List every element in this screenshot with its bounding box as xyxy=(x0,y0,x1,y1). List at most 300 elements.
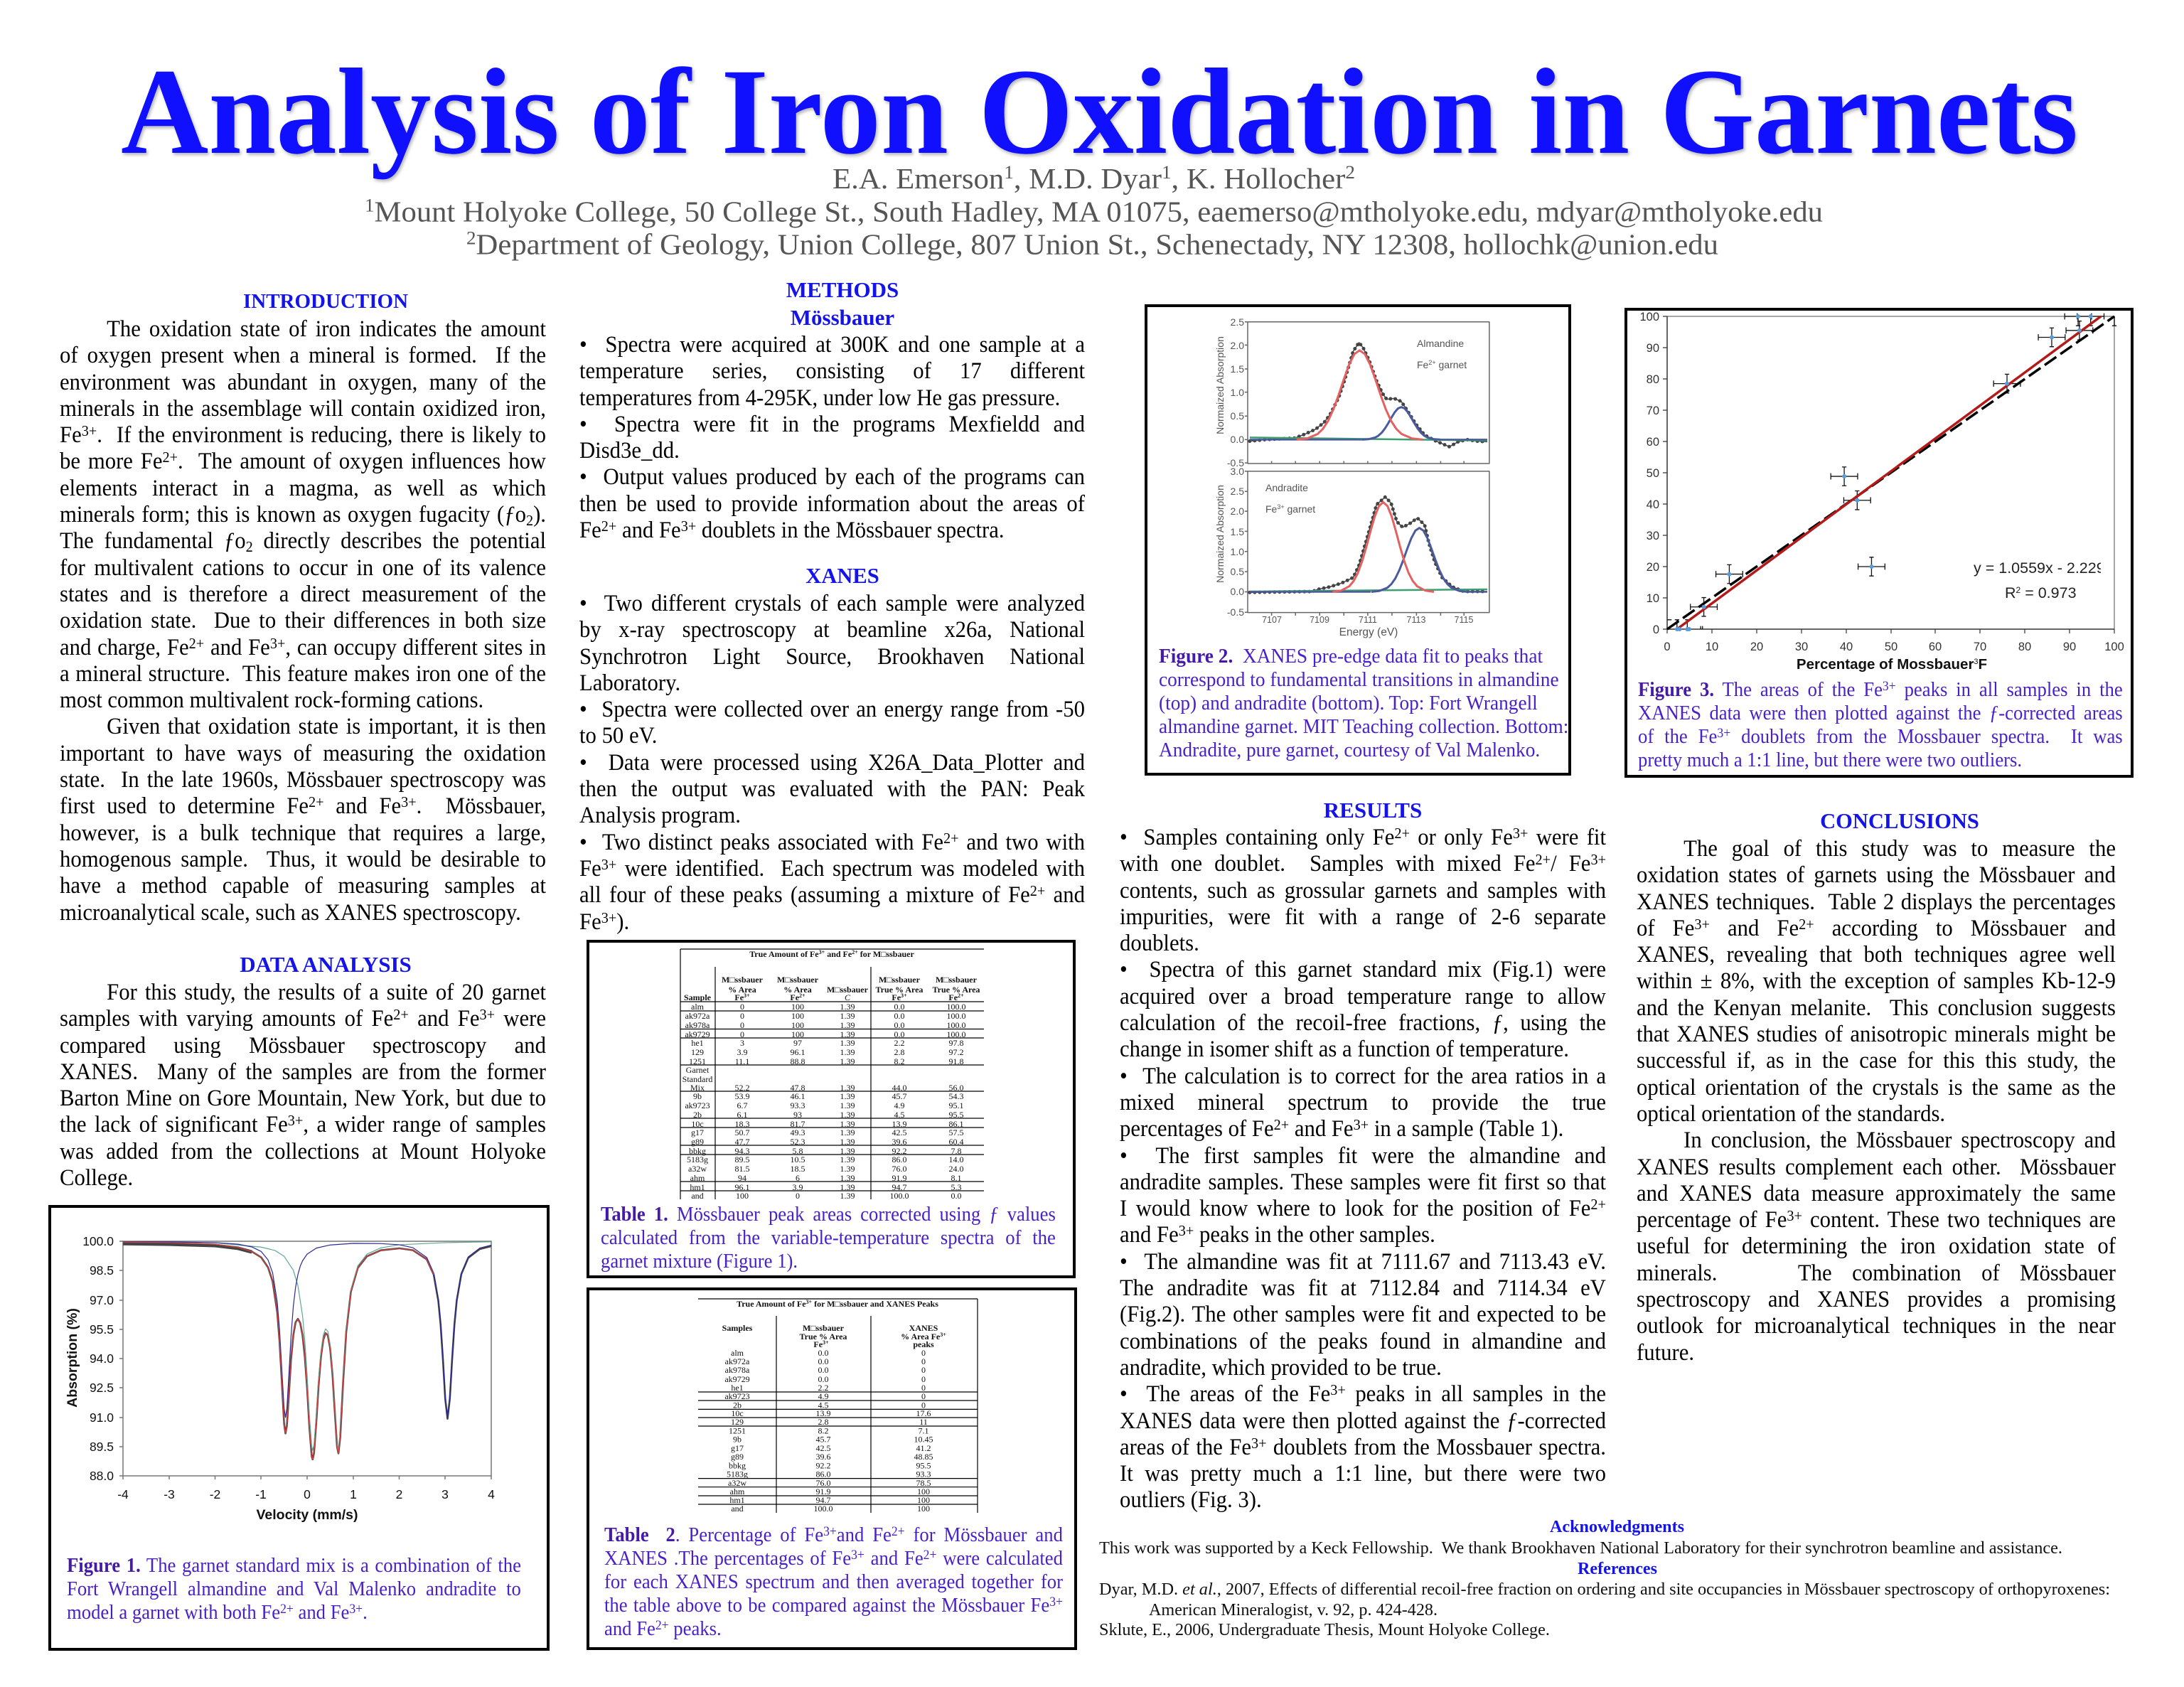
chart: Mössbauer spectrum: -1 xyxy=(255,1487,267,1501)
heading: results: RESULTS xyxy=(1324,798,1422,823)
table: true amount for Mössbauer: and Fe xyxy=(825,949,852,959)
table: true amount for Mössbauer: 47.7 xyxy=(735,1137,749,1147)
table: true amount for Mössbauer: 94.7 xyxy=(892,1182,907,1192)
table: true amount for Mössbauer and XANES: 39.6 xyxy=(816,1452,830,1462)
table: true amount for Mössbauer: ak9729 xyxy=(685,1029,710,1039)
acknowledgments and references: Acknowledgments xyxy=(1550,1518,1684,1536)
table: true amount for Mössbauer: 57.5 xyxy=(948,1128,964,1137)
table: true amount for Mössbauer: ak978a xyxy=(685,1020,710,1030)
table: true amount for Mössbauer: M□ssbauer xyxy=(827,985,869,995)
table: true amount for Mössbauer: 1.39 xyxy=(840,1182,855,1192)
table: true amount for Mössbauer: 3.9 xyxy=(737,1047,748,1057)
text block: introduction: minerals form; this is known as oxygen fugacity (ƒo2). xyxy=(60,502,546,529)
table: true amount for Mössbauer: 1.39 xyxy=(840,1128,855,1137)
chart: XANES vs Mössbauer scatter plot: 10 xyxy=(1647,592,1659,605)
table: true amount for Mössbauer: 52.2 xyxy=(735,1083,749,1093)
table: true amount for Mössbauer and XANES: a32w xyxy=(728,1478,746,1488)
text block: methods XANES: all four of these peaks (assuming a mixture of Fe2+ and xyxy=(579,882,1085,908)
table: true amount for Mössbauer and XANES: he1 xyxy=(731,1383,744,1393)
text block: results: mixed mineral spectrum to provide the true xyxy=(1120,1090,1606,1115)
text block: results: and Fe3+ peaks in the other samples. xyxy=(1120,1222,1435,1248)
table: true amount for Mössbauer: 42.5 xyxy=(892,1128,907,1137)
chart: XANES pre-edge spectra: garnet xyxy=(1285,503,1315,515)
text block: conclusions: spectroscopy and XANES provides a promising xyxy=(1637,1287,2116,1312)
table: true amount for Mössbauer: 1251 xyxy=(689,1056,706,1066)
text block: results: calculation of the recoil-free fractions, ƒ, using the xyxy=(1120,1010,1606,1036)
table: true amount for Mössbauer: Sample xyxy=(684,992,712,1002)
table: true amount for Mössbauer: 96.1 xyxy=(791,1047,805,1057)
text block: conclusions: within ± 8%, with the exception of samples Kb-12-9 xyxy=(1637,968,2116,994)
chart: XANES vs Mössbauer scatter plot: 50 xyxy=(1885,641,1897,653)
chart: XANES pre-edge spectra: Normaized Absorption xyxy=(1214,485,1226,583)
table: true amount for Mössbauer: 100 xyxy=(791,1011,804,1021)
text block: methods XANES: Fe3+ were identified. Each spectrum was modeled with xyxy=(579,856,1085,882)
authors and affiliations: Mount Holyoke College, 50 College St., South Hadley, MA 01075, eaemerso@mtholyoke.edu, mdyar@mtholyoke.edu xyxy=(375,196,1823,228)
table: true amount for Mössbauer: 11.1 xyxy=(735,1056,749,1066)
text block: conclusions: and XANES data measure approximately the same xyxy=(1637,1181,2116,1206)
table: true amount for Mössbauer: 89.5 xyxy=(735,1155,749,1164)
table: true amount for Mössbauer: 97 xyxy=(793,1038,802,1048)
table: true amount for Mössbauer and XANES: 0.0 xyxy=(818,1356,829,1366)
table: true amount for Mössbauer: 0 xyxy=(740,1029,744,1039)
table: true amount for Mössbauer: 100.0 xyxy=(890,1191,909,1201)
text block: results: percentages of Fe2+ and Fe3+ in a sample (Table 1). xyxy=(1120,1116,1563,1142)
table: true amount for Mössbauer: Standard xyxy=(682,1074,712,1084)
table: true amount for Mössbauer and XANES: Samples xyxy=(722,1323,753,1333)
chart: XANES vs Mössbauer scatter plot: 30 xyxy=(1647,530,1659,542)
table: true amount for Mössbauer: 0.0 xyxy=(894,1011,904,1021)
chart: XANES pre-edge spectra: 7111 xyxy=(1359,615,1377,625)
subheading: Mössbauer: Mössbauer xyxy=(791,305,894,330)
table: true amount for Mössbauer and XANES: alm xyxy=(731,1348,744,1358)
table: true amount for Mössbauer: 2b xyxy=(693,1110,702,1120)
table: true amount for Mössbauer: hm1 xyxy=(690,1182,705,1192)
table: true amount for Mössbauer: 18.5 xyxy=(791,1164,805,1174)
table: true amount for Mössbauer and XANES: 86.0 xyxy=(816,1469,830,1479)
text block: introduction: homogenous sample. Thus, it would be desirable to xyxy=(60,847,546,872)
table: true amount for Mössbauer: 0.0 xyxy=(951,1191,961,1201)
table: true amount for Mössbauer and XANES: 8.2 xyxy=(818,1426,829,1436)
heading: methods: METHODS xyxy=(786,277,899,302)
text block: methods Mössbauer xyxy=(579,332,1085,543)
table: true amount for Mössbauer and XANES: 7.1 xyxy=(919,1426,928,1436)
caption: figure 2: (top) and andradite (bottom). Top: Fort Wrangell xyxy=(1159,692,1538,714)
text block: results: andradite samples. These samples were fit first so that xyxy=(1120,1169,1606,1195)
text block: methods XANES: Analysis program. xyxy=(579,803,741,828)
text block: results: areas of the Fe3+ doublets from the Mossbauer spectra. xyxy=(1120,1435,1606,1460)
text block: data analysis: compared using Mössbauer spectroscopy and xyxy=(60,1033,546,1059)
text block: methods Mössbauer: then be used to provide information about the areas of xyxy=(579,491,1085,517)
caption: figure 3: pretty much a 1:1 line, but there were two outliers. xyxy=(1638,749,2022,771)
authors and affiliations: E.A. Emerson xyxy=(833,162,997,195)
text block: introduction: states and is therefore a direct measurement of the xyxy=(60,582,546,607)
chart: XANES vs Mössbauer scatter plot: y = 1.0559x - 2.229 xyxy=(1974,559,2105,577)
table: true amount for Mössbauer: 10.5 xyxy=(791,1155,805,1164)
chart: Mössbauer spectrum: 0 xyxy=(304,1487,311,1501)
table: true amount for Mössbauer and XANES: 93.3 xyxy=(916,1469,931,1479)
chart: XANES pre-edge spectra: 2.0 xyxy=(1231,505,1244,517)
text block: data analysis: was added from the collections at Mount Holyoke xyxy=(60,1139,546,1164)
chart: Mössbauer spectrum: 88.0 xyxy=(90,1469,114,1483)
chart: XANES vs Mössbauer scatter plot: R xyxy=(2005,584,2016,601)
table: true amount for Mössbauer: 14.0 xyxy=(948,1155,964,1164)
text block: conclusions: percentage of Fe3+ content. These two techniques are xyxy=(1637,1207,2116,1233)
chart: XANES pre-edge spectra: 1.5 xyxy=(1231,363,1244,375)
text block: conclusions: optical orientation of the standards. xyxy=(1637,1101,1945,1127)
table: true amount for Mössbauer: 86.0 xyxy=(892,1155,907,1164)
chart: XANES vs Mössbauer scatter plot: Percentage of Mossbauer xyxy=(1797,656,1974,673)
table: true amount for Mössbauer: 0.0 xyxy=(894,1029,904,1039)
chart: XANES pre-edge spectra: 7107 xyxy=(1262,615,1282,625)
caption: table 2: and Fe2+ peaks. xyxy=(604,1617,722,1640)
chart: XANES vs Mössbauer scatter plot: 70 xyxy=(1647,405,1659,417)
chart: XANES vs Mössbauer scatter plot: 2 xyxy=(2016,585,2021,595)
table: true amount for Mössbauer and XANES: 100 xyxy=(917,1504,930,1514)
text block: introduction: a mineral structure. This feature makes iron one of the xyxy=(60,661,546,687)
table: true amount for Mössbauer: 6.7 xyxy=(737,1100,748,1110)
table: true amount for Mössbauer: 1.39 xyxy=(840,1173,855,1183)
table: true amount for Mössbauer: 1.39 xyxy=(840,1100,855,1110)
table: true amount for Mössbauer and XANES: 0 xyxy=(921,1365,926,1375)
table: true amount for Mössbauer: 100 xyxy=(791,1002,804,1012)
table: true amount for Mössbauer and XANES: True Amount of Fe xyxy=(737,1299,806,1309)
authors and affiliations xyxy=(365,162,1823,260)
table: true amount for Mössbauer: True % Area xyxy=(876,985,923,995)
table: true amount for Mössbauer and XANES: 3+ xyxy=(806,1299,813,1305)
table: true amount for Mössbauer: 7.8 xyxy=(951,1146,961,1156)
table: true amount for Mössbauer: 91.8 xyxy=(948,1056,964,1066)
text block: introduction: The oxidation state of iron indicates the amount xyxy=(107,316,546,342)
table: true amount for Mössbauer: 100.0 xyxy=(947,1029,965,1039)
table: true amount for Mössbauer and XANES: bbkg xyxy=(729,1460,746,1470)
text block: conclusions: of Fe3+ and Fe2+ according to Mössbauer and xyxy=(1637,916,2116,941)
text block: results: • Samples containing only Fe2+ or only Fe3+ were fit xyxy=(1120,825,1606,850)
table: true amount for Mössbauer and XANES: 0.0 xyxy=(818,1374,829,1384)
chart: XANES pre-edge spectra: 3+ xyxy=(1277,503,1285,510)
caption: table 1: garnet mixture (Figure 1). xyxy=(601,1250,798,1273)
text block: data analysis xyxy=(60,980,546,1191)
authors and affiliations: 1 xyxy=(1004,162,1014,183)
heading: XANES: XANES xyxy=(805,564,879,588)
table: true amount for Mössbauer: 0 xyxy=(740,1020,744,1030)
table: true amount for Mössbauer: 53.9 xyxy=(735,1091,749,1101)
table: true amount for Mössbauer xyxy=(680,948,984,1201)
text block: methods XANES: Synchrotron Light Source, Brookhaven National xyxy=(579,644,1085,670)
table: true amount for Mössbauer: % Area xyxy=(728,985,756,995)
table: true amount for Mössbauer: 0.0 xyxy=(894,1002,904,1012)
table: true amount for Mössbauer and XANES: XANES xyxy=(909,1323,938,1333)
text block: data analysis: samples with varying amounts of Fe2+ and Fe3+ were xyxy=(60,1006,546,1032)
table: true amount for Mössbauer: ahm xyxy=(690,1173,705,1183)
table: true amount for Mössbauer: 5183g xyxy=(687,1155,708,1164)
chart: XANES pre-edge spectra: Almandine xyxy=(1417,338,1464,349)
table: true amount for Mössbauer and XANES: 5183g xyxy=(727,1469,748,1479)
chart: XANES vs Mössbauer scatter plot: 20 xyxy=(1647,561,1659,574)
table: true amount for Mössbauer: 0 xyxy=(740,1011,744,1021)
table: true amount for Mössbauer: 0 xyxy=(740,1002,744,1012)
table: true amount for Mössbauer: Fe xyxy=(892,992,901,1002)
table: true amount for Mössbauer and XANES: 0 xyxy=(921,1401,926,1410)
table: true amount for Mössbauer: Garnet xyxy=(686,1065,710,1075)
table: true amount for Mössbauer and XANES: 42.5 xyxy=(816,1443,830,1453)
caption: table 2: XANES .The percentages of Fe3+ and Fe2+ were calculated xyxy=(604,1547,1063,1570)
table: true amount for Mössbauer: 13.9 xyxy=(892,1119,907,1129)
text block: methods XANES: • Spectra were collected over an energy range from -50 xyxy=(579,697,1085,722)
text block: methods Mössbauer: Disd3e_dd. xyxy=(579,438,680,464)
text block: conclusions: oxidation states of garnets using the Mössbauer and xyxy=(1637,862,2116,888)
table: true amount for Mössbauer: 8.1 xyxy=(951,1173,961,1183)
table: true amount for Mössbauer and XANES: 100 xyxy=(917,1487,930,1496)
text block: conclusions: XANES techniques. Table 2 displays the percentages xyxy=(1637,889,2116,915)
table: true amount for Mössbauer: Mix xyxy=(690,1083,705,1093)
text block: introduction: of oxygen present when a mineral is formed. If the xyxy=(60,343,546,368)
table: true amount for Mössbauer: 4.5 xyxy=(894,1110,904,1120)
table: true amount for Mössbauer: M□ssbauer xyxy=(777,975,819,985)
table: true amount for Mössbauer and XANES: 10.45 xyxy=(914,1435,933,1445)
table: true amount for Mössbauer: 1.39 xyxy=(840,1083,855,1093)
heading: data analysis: DATA ANALYSIS xyxy=(240,952,412,977)
acknowledgments and references: Sklute, E., 2006, Undergraduate Thesis, Mount Holyoke College. xyxy=(1099,1621,1550,1639)
caption: figure 1: Figure 1. The garnet standard mix is a combination of the xyxy=(67,1554,521,1577)
caption: figure 3: Figure 3. The areas of the Fe3+ peaks in all samples in the xyxy=(1638,678,2123,701)
table: true amount for Mössbauer and XANES: 4.5 xyxy=(818,1401,829,1410)
caption: figure 3 xyxy=(1638,678,2123,771)
table: true amount for Mössbauer and XANES xyxy=(698,1298,978,1514)
table: true amount for Mössbauer and XANES: ak978a xyxy=(725,1365,750,1375)
table: true amount for Mössbauer: 1.39 xyxy=(840,1002,855,1012)
chart: Mössbauer spectrum: -2 xyxy=(210,1487,220,1501)
table: true amount for Mössbauer: 93 xyxy=(793,1110,802,1120)
table: true amount for Mössbauer: 54.3 xyxy=(948,1091,964,1101)
text block: results: impurities, were fit with a range of 2-6 separate xyxy=(1120,904,1606,930)
table: true amount for Mössbauer: a32w xyxy=(688,1164,707,1174)
chart: XANES vs Mössbauer scatter plot: 0 xyxy=(1653,623,1659,636)
text block: conclusions: minerals. The combination of Mössbauer xyxy=(1637,1260,2116,1286)
caption: figure 3: XANES data were then plotted against the ƒ-corrected areas xyxy=(1638,702,2123,724)
acknowledgments and references: American Mineralogist, v. 92, p. 424-428. xyxy=(1149,1601,1438,1619)
text block: conclusions: outlook for microanalytical techniques in the near xyxy=(1637,1313,2116,1339)
caption: table 2: for each XANES spectrum and then averaged together for xyxy=(604,1570,1063,1593)
table: true amount for Mössbauer: True Amount of Fe xyxy=(749,949,819,959)
chart: Mössbauer spectrum: -4 xyxy=(117,1487,129,1501)
table: true amount for Mössbauer: Fe xyxy=(948,992,958,1002)
text block: data analysis: XANES. Many of the samples are from the former xyxy=(60,1059,546,1085)
table: true amount for Mössbauer and XANES: 129 xyxy=(731,1417,744,1427)
caption: table 2 xyxy=(604,1523,1063,1640)
table: true amount for Mössbauer: 95.1 xyxy=(948,1100,964,1110)
text block: introduction: be more Fe2+. The amount of oxygen influences how xyxy=(60,449,546,474)
caption: figure 1: Fort Wrangell almandine and Val Malenko andradite to xyxy=(67,1578,521,1600)
chart: XANES vs Mössbauer scatter plot: 30 xyxy=(1795,641,1808,653)
chart: XANES pre-edge spectra: 3.0 xyxy=(1231,466,1244,477)
table: true amount for Mössbauer and XANES: 0 xyxy=(921,1383,926,1393)
text block: methods XANES: then the output was evaluated with the PAN: Peak xyxy=(579,776,1085,802)
table: true amount for Mössbauer and XANES: 76.0 xyxy=(816,1478,830,1488)
caption: figure 2: Figure 2. XANES pre-edge data fit to peaks that xyxy=(1159,645,1543,668)
table: true amount for Mössbauer: 93.3 xyxy=(791,1100,805,1110)
text block: conclusions: The goal of this study was to measure the xyxy=(1684,836,2116,862)
table: true amount for Mössbauer: 100.0 xyxy=(947,1002,965,1012)
table: true amount for Mössbauer: g89 xyxy=(691,1137,704,1147)
table: true amount for Mössbauer: Fe xyxy=(790,992,799,1002)
table: true amount for Mössbauer: 86.1 xyxy=(948,1119,964,1129)
chart: Mössbauer spectrum: -3 xyxy=(164,1487,175,1501)
table: true amount for Mössbauer: 3.9 xyxy=(792,1182,803,1192)
table: true amount for Mössbauer and XANES: 0 xyxy=(921,1374,926,1384)
table: true amount for Mössbauer: 1.39 xyxy=(840,1137,855,1147)
chart: XANES pre-edge spectra: 2.0 xyxy=(1231,340,1244,351)
table: true amount for Mössbauer and XANES: 0.0 xyxy=(818,1348,829,1358)
text block: introduction: state. In the late 1960s, Mössbauer spectroscopy was xyxy=(60,767,546,793)
chart: Mössbauer spectrum: 98.5 xyxy=(90,1263,114,1278)
chart: XANES vs Mössbauer scatter plot xyxy=(1639,311,2124,673)
chart: XANES pre-edge spectra: 2.5 xyxy=(1231,486,1244,497)
text block: methods XANES: Laboratory. xyxy=(579,670,680,696)
table: true amount for Mössbauer: 1.39 xyxy=(840,1146,855,1156)
text block: methods Mössbauer: temperatures from 4-295K, under low He gas pressure. xyxy=(579,385,1060,411)
panel: figure 1 xyxy=(48,1205,550,1651)
text block: results: • The first samples fit were the almandine and xyxy=(1120,1143,1606,1169)
table: true amount for Mössbauer: 97.2 xyxy=(948,1047,964,1057)
table: true amount for Mössbauer: 1.39 xyxy=(840,1155,855,1164)
chart: XANES vs Mössbauer scatter plot: 40 xyxy=(1840,641,1853,653)
table: true amount for Mössbauer: he1 xyxy=(691,1038,704,1048)
chart: XANES pre-edge spectra: Normaized Absorption xyxy=(1214,336,1226,434)
chart: Mössbauer spectrum xyxy=(65,1234,495,1523)
table: true amount for Mössbauer and XANES: M□ssbauer xyxy=(803,1323,845,1333)
text block: data analysis: the lack of significant Fe3+, a wider range of samples xyxy=(60,1112,546,1137)
table: true amount for Mössbauer: bbkg xyxy=(689,1146,706,1156)
chart: XANES pre-edge spectra: 1.0 xyxy=(1231,387,1244,398)
caption: figure 2: correspond to fundamental transitions in almandine xyxy=(1159,668,1559,691)
acknowledgments and references xyxy=(1099,1518,2110,1639)
chart: XANES vs Mössbauer scatter plot: 40 xyxy=(1647,498,1659,511)
panel: figure 2 xyxy=(1145,304,1571,776)
acknowledgments and references: This work was supported by a Keck Fellowship. We thank Brookhaven National Laboratory for their synchrotron beamline and assistance. xyxy=(1099,1539,2062,1558)
table: true amount for Mössbauer: Fe xyxy=(734,992,744,1002)
table: true amount for Mössbauer: 81.5 xyxy=(735,1164,749,1174)
table: true amount for Mössbauer: 56.0 xyxy=(948,1083,964,1093)
chart: XANES vs Mössbauer scatter plot: 100 xyxy=(1639,311,1659,323)
table: true amount for Mössbauer and XANES: 95.5 xyxy=(916,1460,931,1470)
caption: figure 3: of the Fe3+ doublets from the Mossbauer spectra. It was xyxy=(1638,725,2123,748)
text block: introduction: for multivalent cations to occur in one of its valence xyxy=(60,555,546,581)
text block: introduction: microanalytical scale, such as XANES spectroscopy. xyxy=(60,900,521,926)
acknowledgments and references: References xyxy=(1578,1560,1657,1578)
text block: results: • Spectra of this garnet standard mix (Fig.1) were xyxy=(1120,957,1606,982)
table: true amount for Mössbauer: 10c xyxy=(691,1119,704,1129)
text block: introduction xyxy=(60,316,546,926)
caption: figure 2 xyxy=(1159,645,1568,761)
table: true amount for Mössbauer: 1.39 xyxy=(840,1020,855,1030)
chart: XANES pre-edge spectra: Energy (eV) xyxy=(1339,626,1398,638)
table: true amount for Mössbauer: % Area xyxy=(783,985,812,995)
text block: introduction: environment was abundant in oxygen, many of the xyxy=(60,370,546,395)
table: true amount for Mössbauer: 1.39 xyxy=(840,1056,855,1066)
table: true amount for Mössbauer: 1.39 xyxy=(840,1047,855,1057)
table: true amount for Mössbauer: 39.6 xyxy=(892,1137,907,1147)
table: true amount for Mössbauer: 3 xyxy=(740,1038,744,1048)
table: true amount for Mössbauer: 3+ xyxy=(901,992,907,999)
authors and affiliations: 1 xyxy=(365,196,375,216)
text block: conclusions: and the Kenyan melanite. This conclusion suggests xyxy=(1637,995,2116,1021)
authors and affiliations: 2 xyxy=(466,227,476,249)
table: true amount for Mössbauer and XANES: peaks xyxy=(913,1339,934,1349)
table: true amount for Mössbauer and XANES: 92.2 xyxy=(816,1460,830,1470)
panel: table 2 xyxy=(587,1287,1077,1650)
authors and affiliations: 2 xyxy=(1345,162,1355,183)
acknowledgments and references: Dyar, M.D. et al., 2007, Effects of differential recoil-free fraction on ordering and site occupancies in Mössbauer spectroscopy of orthopyroxenes: xyxy=(1099,1580,2110,1599)
text block: methods Mössbauer: Fe2+ and Fe3+ doublets in the Mössbauer spectra. xyxy=(579,518,1005,543)
caption: figure 1: model a garnet with both Fe2+ and Fe3+. xyxy=(67,1601,368,1624)
heading: conclusions: CONCLUSIONS xyxy=(1820,809,1979,833)
table: true amount for Mössbauer and XANES: 78.5 xyxy=(916,1478,931,1488)
chart: Mössbauer spectrum: Absorption (%) xyxy=(65,1308,80,1408)
text block: results: andradite, which provided to be true. xyxy=(1120,1355,1442,1381)
heading: introduction: INTRODUCTION xyxy=(243,290,408,313)
authors and affiliations: 1 xyxy=(1162,162,1172,183)
table: true amount for Mössbauer: 1.39 xyxy=(840,1038,855,1048)
table: true amount for Mössbauer: 1.39 xyxy=(840,1011,855,1021)
table: true amount for Mössbauer: ak9723 xyxy=(685,1100,710,1110)
chart: XANES vs Mössbauer scatter plot: = 0.973 xyxy=(2020,584,2077,601)
chart: XANES vs Mössbauer scatter plot: 50 xyxy=(1647,467,1659,480)
chart: XANES pre-edge spectra xyxy=(1214,316,1490,638)
chart: XANES pre-edge spectra: 0.5 xyxy=(1231,410,1244,422)
table: true amount for Mössbauer: 76.0 xyxy=(892,1164,907,1174)
text block: conclusions xyxy=(1637,836,2116,1366)
authors and affiliations: , M.D. Dyar xyxy=(1014,162,1162,195)
chart: Mössbauer spectrum: 2 xyxy=(396,1487,402,1501)
chart: Mössbauer spectrum: 4 xyxy=(488,1487,495,1501)
table: true amount for Mössbauer: 49.3 xyxy=(791,1128,805,1137)
table: true amount for Mössbauer: 1.39 xyxy=(840,1164,855,1174)
table: true amount for Mössbauer and XANES: 0.0 xyxy=(818,1365,829,1375)
table: true amount for Mössbauer: 5.3 xyxy=(951,1182,961,1192)
text block: results: • The almandine was fit at 7111.67 and 7113.43 eV. xyxy=(1120,1249,1606,1275)
text block: results: • The areas of the Fe3+ peaks in all samples in the xyxy=(1120,1381,1606,1407)
text block: methods XANES: • Two distinct peaks associated with Fe2+ and two with xyxy=(579,830,1085,855)
text block: results: I would know where to look for the position of Fe2+ xyxy=(1120,1196,1606,1221)
table: true amount for Mössbauer: 2.8 xyxy=(894,1047,904,1057)
table: true amount for Mössbauer and XANES: 13.9 xyxy=(816,1408,830,1418)
text block: introduction: elements interact in a magma, as well as which xyxy=(60,476,546,501)
chart: XANES vs Mössbauer scatter plot: 90 xyxy=(2063,641,2076,653)
text block: methods XANES: • Data were processed using X26A_Data_Plotter and xyxy=(579,750,1085,776)
table: true amount for Mössbauer: 46.1 xyxy=(791,1091,805,1101)
table: true amount for Mössbauer and XANES: g89 xyxy=(731,1452,744,1462)
table: true amount for Mössbauer: 1.39 xyxy=(840,1191,855,1201)
table: true amount for Mössbauer: M□ssbauer xyxy=(879,975,921,985)
text block: methods XANES: • Two different crystals of each sample were analyzed xyxy=(579,591,1085,616)
text block: results: combinations of the peaks found in almandine and xyxy=(1120,1329,1606,1354)
chart: XANES pre-edge spectra: 7109 xyxy=(1310,615,1329,625)
table: true amount for Mössbauer and XANES: 0 xyxy=(921,1348,926,1358)
chart: Mössbauer spectrum: 1 xyxy=(350,1487,357,1501)
table: true amount for Mössbauer and XANES: 45.7 xyxy=(816,1435,830,1445)
table: true amount for Mössbauer: 52.3 xyxy=(791,1137,805,1147)
chart: XANES vs Mössbauer scatter plot: 0 xyxy=(1664,641,1671,653)
table: true amount for Mössbauer: 81.7 xyxy=(791,1119,805,1129)
caption: table 1: calculated from the variable-temperature spectra of the xyxy=(601,1226,1056,1249)
table: true amount for Mössbauer: C xyxy=(845,992,851,1002)
table: true amount for Mössbauer and XANES: 41.2 xyxy=(916,1443,931,1453)
table: true amount for Mössbauer: 4.9 xyxy=(894,1100,904,1110)
table: true amount for Mössbauer and XANES: hm1 xyxy=(729,1495,745,1505)
table: true amount for Mössbauer: and xyxy=(691,1191,704,1201)
table: true amount for Mössbauer: 6.1 xyxy=(737,1110,748,1120)
table: true amount for Mössbauer and XANES: 1251 xyxy=(729,1426,746,1436)
